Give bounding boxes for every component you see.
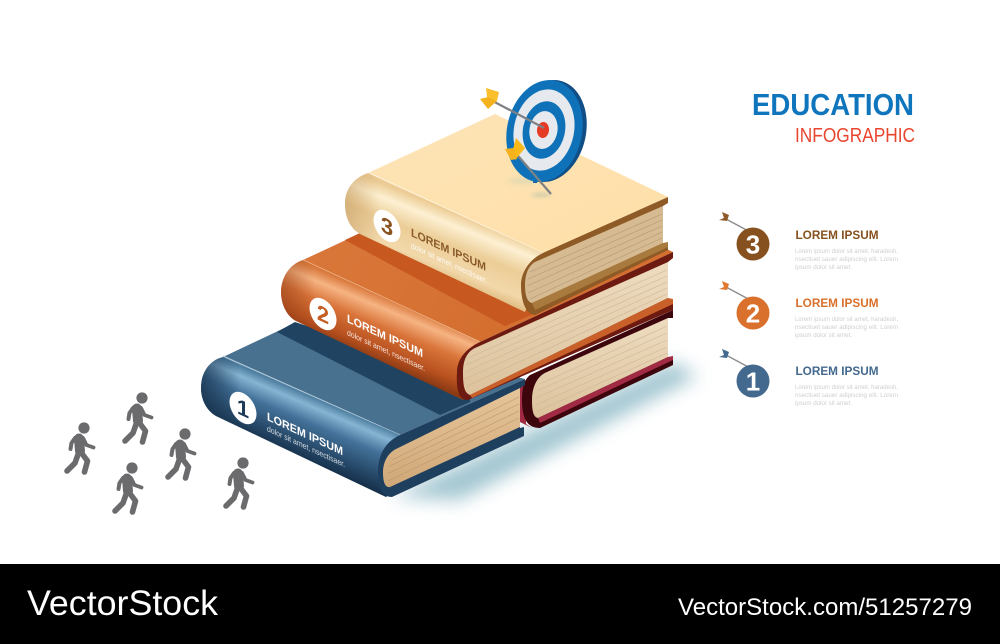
legend item 2: ipsum dolor sit amet. bbox=[795, 332, 852, 339]
legend item 2 bbox=[719, 281, 898, 339]
legend item 2: nsectiuet sauer adipiscing elit. Lorem bbox=[795, 324, 898, 331]
blue top cover bbox=[223, 323, 525, 435]
arrow stuck in book cover bbox=[505, 138, 551, 194]
orange front cover and pages bbox=[457, 252, 673, 400]
number badge 2 bbox=[310, 293, 336, 335]
number badge 2: 2 bbox=[317, 299, 329, 330]
person bbox=[115, 462, 142, 512]
legend item 2: 2 bbox=[746, 298, 760, 328]
person bbox=[67, 422, 94, 472]
legend item 1: nsectiuet sauer adipiscing elit. Lorem bbox=[795, 392, 898, 399]
people walking bbox=[67, 392, 252, 512]
number badge 3 bbox=[374, 205, 400, 247]
book: maroon bottom-right book bbox=[520, 310, 673, 428]
number badge 1: 1 bbox=[237, 393, 249, 424]
footer image id: VectorStock.com/51257279 bbox=[678, 594, 972, 621]
legend item 1: ipsum dolor sit amet. bbox=[795, 400, 852, 407]
book 1: blue bbox=[201, 322, 525, 497]
footer bar bbox=[0, 564, 1000, 644]
person bbox=[125, 392, 152, 442]
number badge 1 bbox=[230, 387, 256, 429]
spine label 3: dolor sit amet, nsectisaer. bbox=[411, 240, 487, 285]
spine label 1: dolor sit amet, nsectisaer. bbox=[267, 423, 345, 469]
legend item 3: Lorem ipsum dolor sit amet, haradesh, bbox=[795, 248, 898, 255]
spine label 2: dolor sit amet, nsectisaer. bbox=[347, 327, 425, 373]
blue spine bbox=[201, 357, 400, 497]
legend item 3: 3 bbox=[746, 230, 760, 260]
number badge 3: 3 bbox=[381, 211, 393, 242]
legend item 3: ipsum dolor sit amet. bbox=[795, 264, 852, 271]
legend item 2: LOREM IPSUM bbox=[796, 298, 878, 310]
cream spine bbox=[345, 173, 543, 312]
spine label 2: LOREM IPSUM bbox=[347, 312, 423, 360]
legend item 3 bbox=[719, 212, 898, 271]
title bbox=[752, 87, 915, 147]
book 3: cream bbox=[345, 114, 668, 315]
arrow stuck in bullseye bbox=[480, 88, 544, 128]
legend item 2: Lorem ipsum dolor sit amet, haradesh, bbox=[795, 316, 898, 323]
floor shadow under books bbox=[392, 362, 698, 500]
subtitle: INFOGRAPHIC bbox=[795, 124, 915, 147]
legend item 3: nsectiuet sauer adipiscing elit. Lorem bbox=[795, 256, 898, 263]
footer brand: VectorStock bbox=[27, 584, 219, 623]
orange top cover bbox=[303, 170, 673, 342]
icon: target with arrows bbox=[480, 73, 596, 196]
cream front cover and pages bbox=[521, 197, 668, 315]
legend item 1: 1 bbox=[746, 366, 760, 396]
blue front cover and pages bbox=[378, 379, 525, 497]
spine label 1: LOREM IPSUM bbox=[267, 410, 343, 458]
book 2: orange bbox=[281, 170, 673, 400]
legend item 1: LOREM IPSUM bbox=[796, 366, 878, 378]
title: EDUCATION bbox=[752, 87, 914, 122]
cream top cover bbox=[368, 114, 668, 253]
legend item 1 bbox=[719, 349, 898, 407]
orange spine bbox=[281, 260, 480, 400]
person bbox=[226, 457, 252, 507]
spine label 3: LOREM IPSUM bbox=[411, 226, 486, 274]
legend item 1: Lorem ipsum dolor sit amet, haradesh, bbox=[795, 384, 898, 391]
legend item 3: LOREM IPSUM bbox=[796, 230, 878, 242]
person bbox=[168, 428, 194, 478]
